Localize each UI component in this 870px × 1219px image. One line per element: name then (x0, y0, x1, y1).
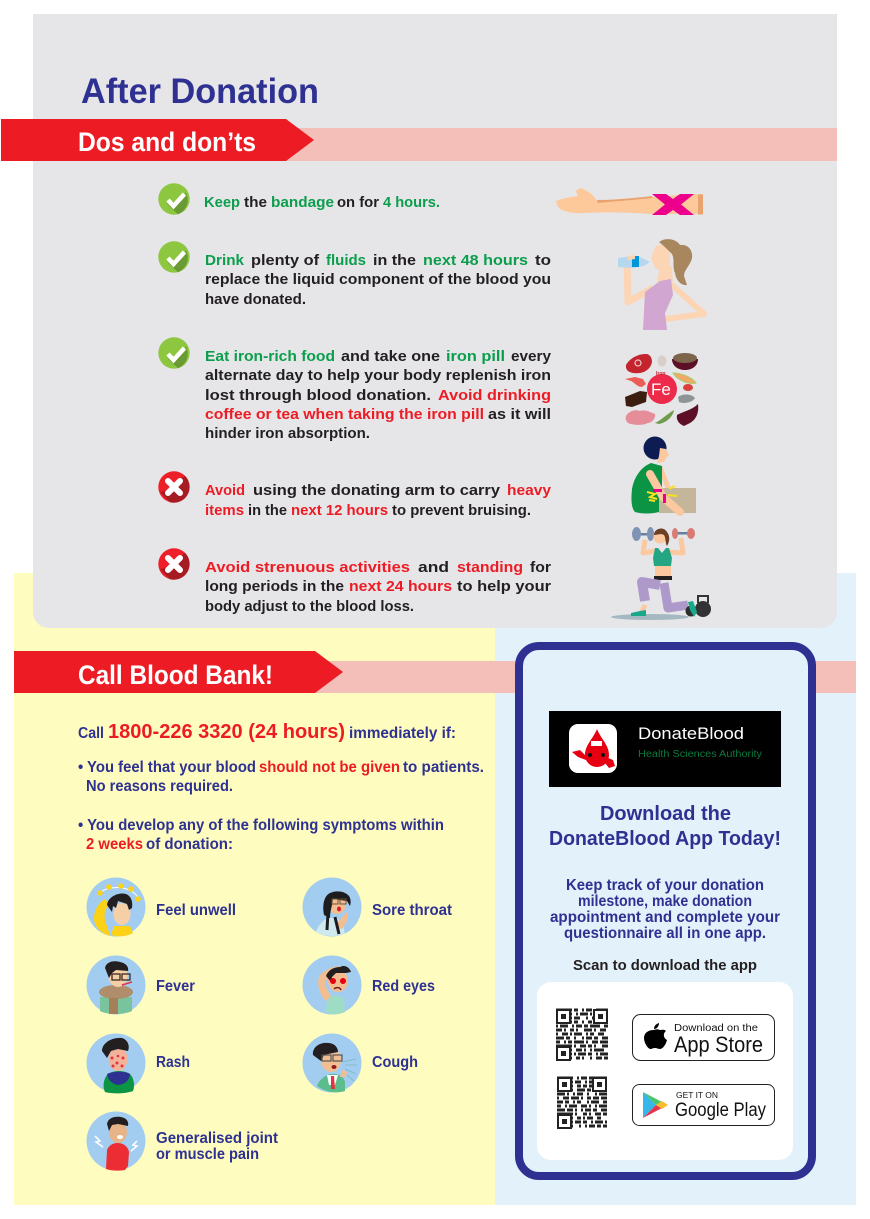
text: avoid carrying heavy items: next 12 hours (291, 502, 388, 519)
text: iron-rich food: every (511, 348, 552, 365)
app banner: Health Sciences Authority (638, 749, 762, 760)
symptom: cough: Cough (372, 1054, 418, 1071)
text: avoid carrying heavy items: to prevent bruising. (392, 502, 531, 519)
text: iron-rich food: Eat iron-rich food (205, 348, 335, 365)
qr code: google play (557, 1077, 607, 1129)
text: drink fluids: in the (373, 252, 416, 269)
button: app store: Download on the (674, 1023, 758, 1034)
text: drink fluids (205, 252, 551, 308)
text: condition two: of donation: (146, 836, 233, 853)
app banner: DonateBlood (638, 725, 744, 743)
text: condition two (78, 817, 444, 853)
heading band: call blood bank: Call Blood Bank! (78, 660, 273, 690)
text: drink fluids: to (535, 252, 551, 269)
panel: download card (537, 982, 793, 1160)
symptom: sore throat: Sore throat (372, 902, 452, 919)
text: avoid strenuous activities: for (530, 559, 551, 576)
text: call number (78, 721, 456, 743)
icon: arm with bandage (556, 188, 703, 215)
symptom: feel unwell: Feel unwell (156, 902, 236, 919)
qr code: app store (556, 1009, 608, 1061)
text: iron-rich food: Avoid drinking (438, 387, 551, 404)
symptom: red eyes: Red eyes (372, 978, 435, 995)
text: scan prompt: Scan to download the app (573, 957, 757, 974)
symptom: joint or muscle pain: Generalised joint (156, 1130, 278, 1147)
symptom: rash (86, 1034, 190, 1093)
text: condition one: No reasons required. (86, 778, 233, 795)
button: app store (632, 1014, 774, 1060)
text: drink fluids: replace the liquid component of the blood you (205, 271, 551, 288)
button: google play: Google Play (675, 1100, 766, 1121)
text: keep the bandage: the (244, 194, 267, 211)
text: drink fluids: plenty of (251, 252, 320, 269)
text: avoid carrying heavy items: items (205, 502, 244, 519)
text: avoid carrying heavy items (205, 482, 552, 519)
text: condition one: to patients. (403, 759, 484, 776)
icon: check 2 (158, 241, 190, 273)
text: avoid carrying heavy items: heavy (507, 482, 552, 499)
button: google play (632, 1084, 774, 1126)
text: avoid carrying heavy items: Avoid (205, 482, 245, 499)
text: keep the bandage: 4 hours. (383, 194, 440, 211)
text: avoid carrying heavy items: using the donating arm to carry (253, 482, 501, 499)
icon: apple logo (644, 1023, 667, 1049)
symptom: feel unwell (86, 878, 236, 936)
icon: woman lifting a box (631, 436, 696, 514)
heading: download the app: Download the (600, 803, 731, 825)
text: condition one: • You feel that your blood (78, 759, 256, 776)
text: condition two: • You develop any of the following symptoms within (78, 817, 444, 834)
text: call number: Call (78, 725, 104, 742)
text: avoid strenuous activities: Avoid strenuous activities (205, 559, 410, 576)
panel: blue app section background (495, 573, 856, 1205)
text: avoid strenuous activities (205, 559, 551, 615)
symptom: cough (302, 1034, 418, 1092)
symptom: joint or muscle pain: or muscle pain (156, 1146, 259, 1163)
text: avoid strenuous activities: standing (457, 559, 523, 576)
icon: woman drinking water (618, 239, 704, 330)
icon: woman exercising with weights (611, 527, 711, 620)
title: After Donation (81, 72, 319, 111)
text: avoid strenuous activities: to help your (457, 578, 551, 595)
text: avoid strenuous activities: next 24 hours (349, 578, 452, 595)
symptom: joint or muscle pain (86, 1112, 278, 1171)
text: iron-rich food: hinder iron absorption. (205, 425, 370, 442)
panel: after donation grey card (33, 14, 837, 628)
icon: donateblood app (569, 724, 617, 773)
text: iron-rich food: alternate day to help your body replenish iron (205, 367, 551, 384)
text: keep the bandage: bandage (271, 194, 334, 211)
heading band: call blood bank (14, 651, 856, 693)
panel: phone frame (519, 646, 812, 1176)
text: avoid strenuous activities: and (418, 559, 449, 576)
heading: download the app: DonateBlood App Today! (549, 828, 781, 850)
heading band: dos and don'ts (1, 119, 837, 161)
text: app description: milestone, make donation (578, 893, 752, 910)
text: call number: 1800-226 3320 (24 hours) (108, 721, 345, 743)
text: app description: questionnaire all in one app. (564, 925, 766, 942)
app banner (549, 711, 781, 787)
text: iron-rich food: as it will (488, 406, 551, 423)
text: condition two: 2 weeks (86, 836, 143, 853)
symptom: fever (86, 956, 195, 1014)
text: drink fluids: fluids (326, 252, 366, 269)
icon: check 1 (158, 183, 190, 215)
text: app description: Keep track of your donation (566, 877, 764, 894)
text: app description (550, 877, 780, 942)
text: condition one (78, 759, 484, 795)
text: keep the bandage: on for (337, 194, 379, 211)
text: avoid carrying heavy items: in the (248, 502, 287, 519)
text: iron-rich food: coffee or tea when taking the iron pill (205, 406, 484, 423)
icon: cross 2 (158, 548, 190, 580)
text: iron-rich food: iron pill (446, 348, 505, 365)
symptom: red eyes (302, 956, 435, 1014)
button: google play: GET IT ON (676, 1090, 718, 1100)
icon: iron-rich foods: Fe (651, 380, 671, 399)
text: avoid strenuous activities: long periods in the (205, 578, 344, 595)
icon: play logo (643, 1092, 668, 1118)
text: drink fluids: have donated. (205, 291, 306, 308)
button: app store: App Store (674, 1032, 763, 1057)
symptom: rash: Rash (156, 1054, 190, 1071)
text: condition one: should not be given (259, 759, 400, 776)
symptom: sore throat (302, 878, 452, 936)
text: drink fluids: next 48 hours (423, 252, 528, 269)
heading band: dos and don'ts: Dos and don’ts (78, 127, 256, 157)
panel: yellow call section background (14, 573, 495, 1205)
text: avoid strenuous activities: body adjust to the blood loss. (205, 598, 414, 615)
icon: cross 1 (158, 471, 190, 503)
text: iron-rich food: lost through blood donation. (205, 387, 431, 404)
icon: check 3 (158, 337, 190, 369)
text: keep the bandage (204, 194, 440, 211)
text: keep the bandage: Keep (204, 194, 240, 211)
icon: iron-rich foods (625, 353, 698, 426)
heading: download the app (549, 803, 781, 850)
icon: iron-rich foods: Iron (656, 371, 665, 377)
text: iron-rich food (205, 348, 552, 442)
symptom: fever: Fever (156, 978, 195, 995)
text: app description: appointment and complete your (550, 909, 780, 926)
text: iron-rich food: and take one (341, 348, 440, 365)
text: drink fluids: Drink (205, 252, 245, 269)
text: call number: immediately if: (349, 725, 456, 742)
